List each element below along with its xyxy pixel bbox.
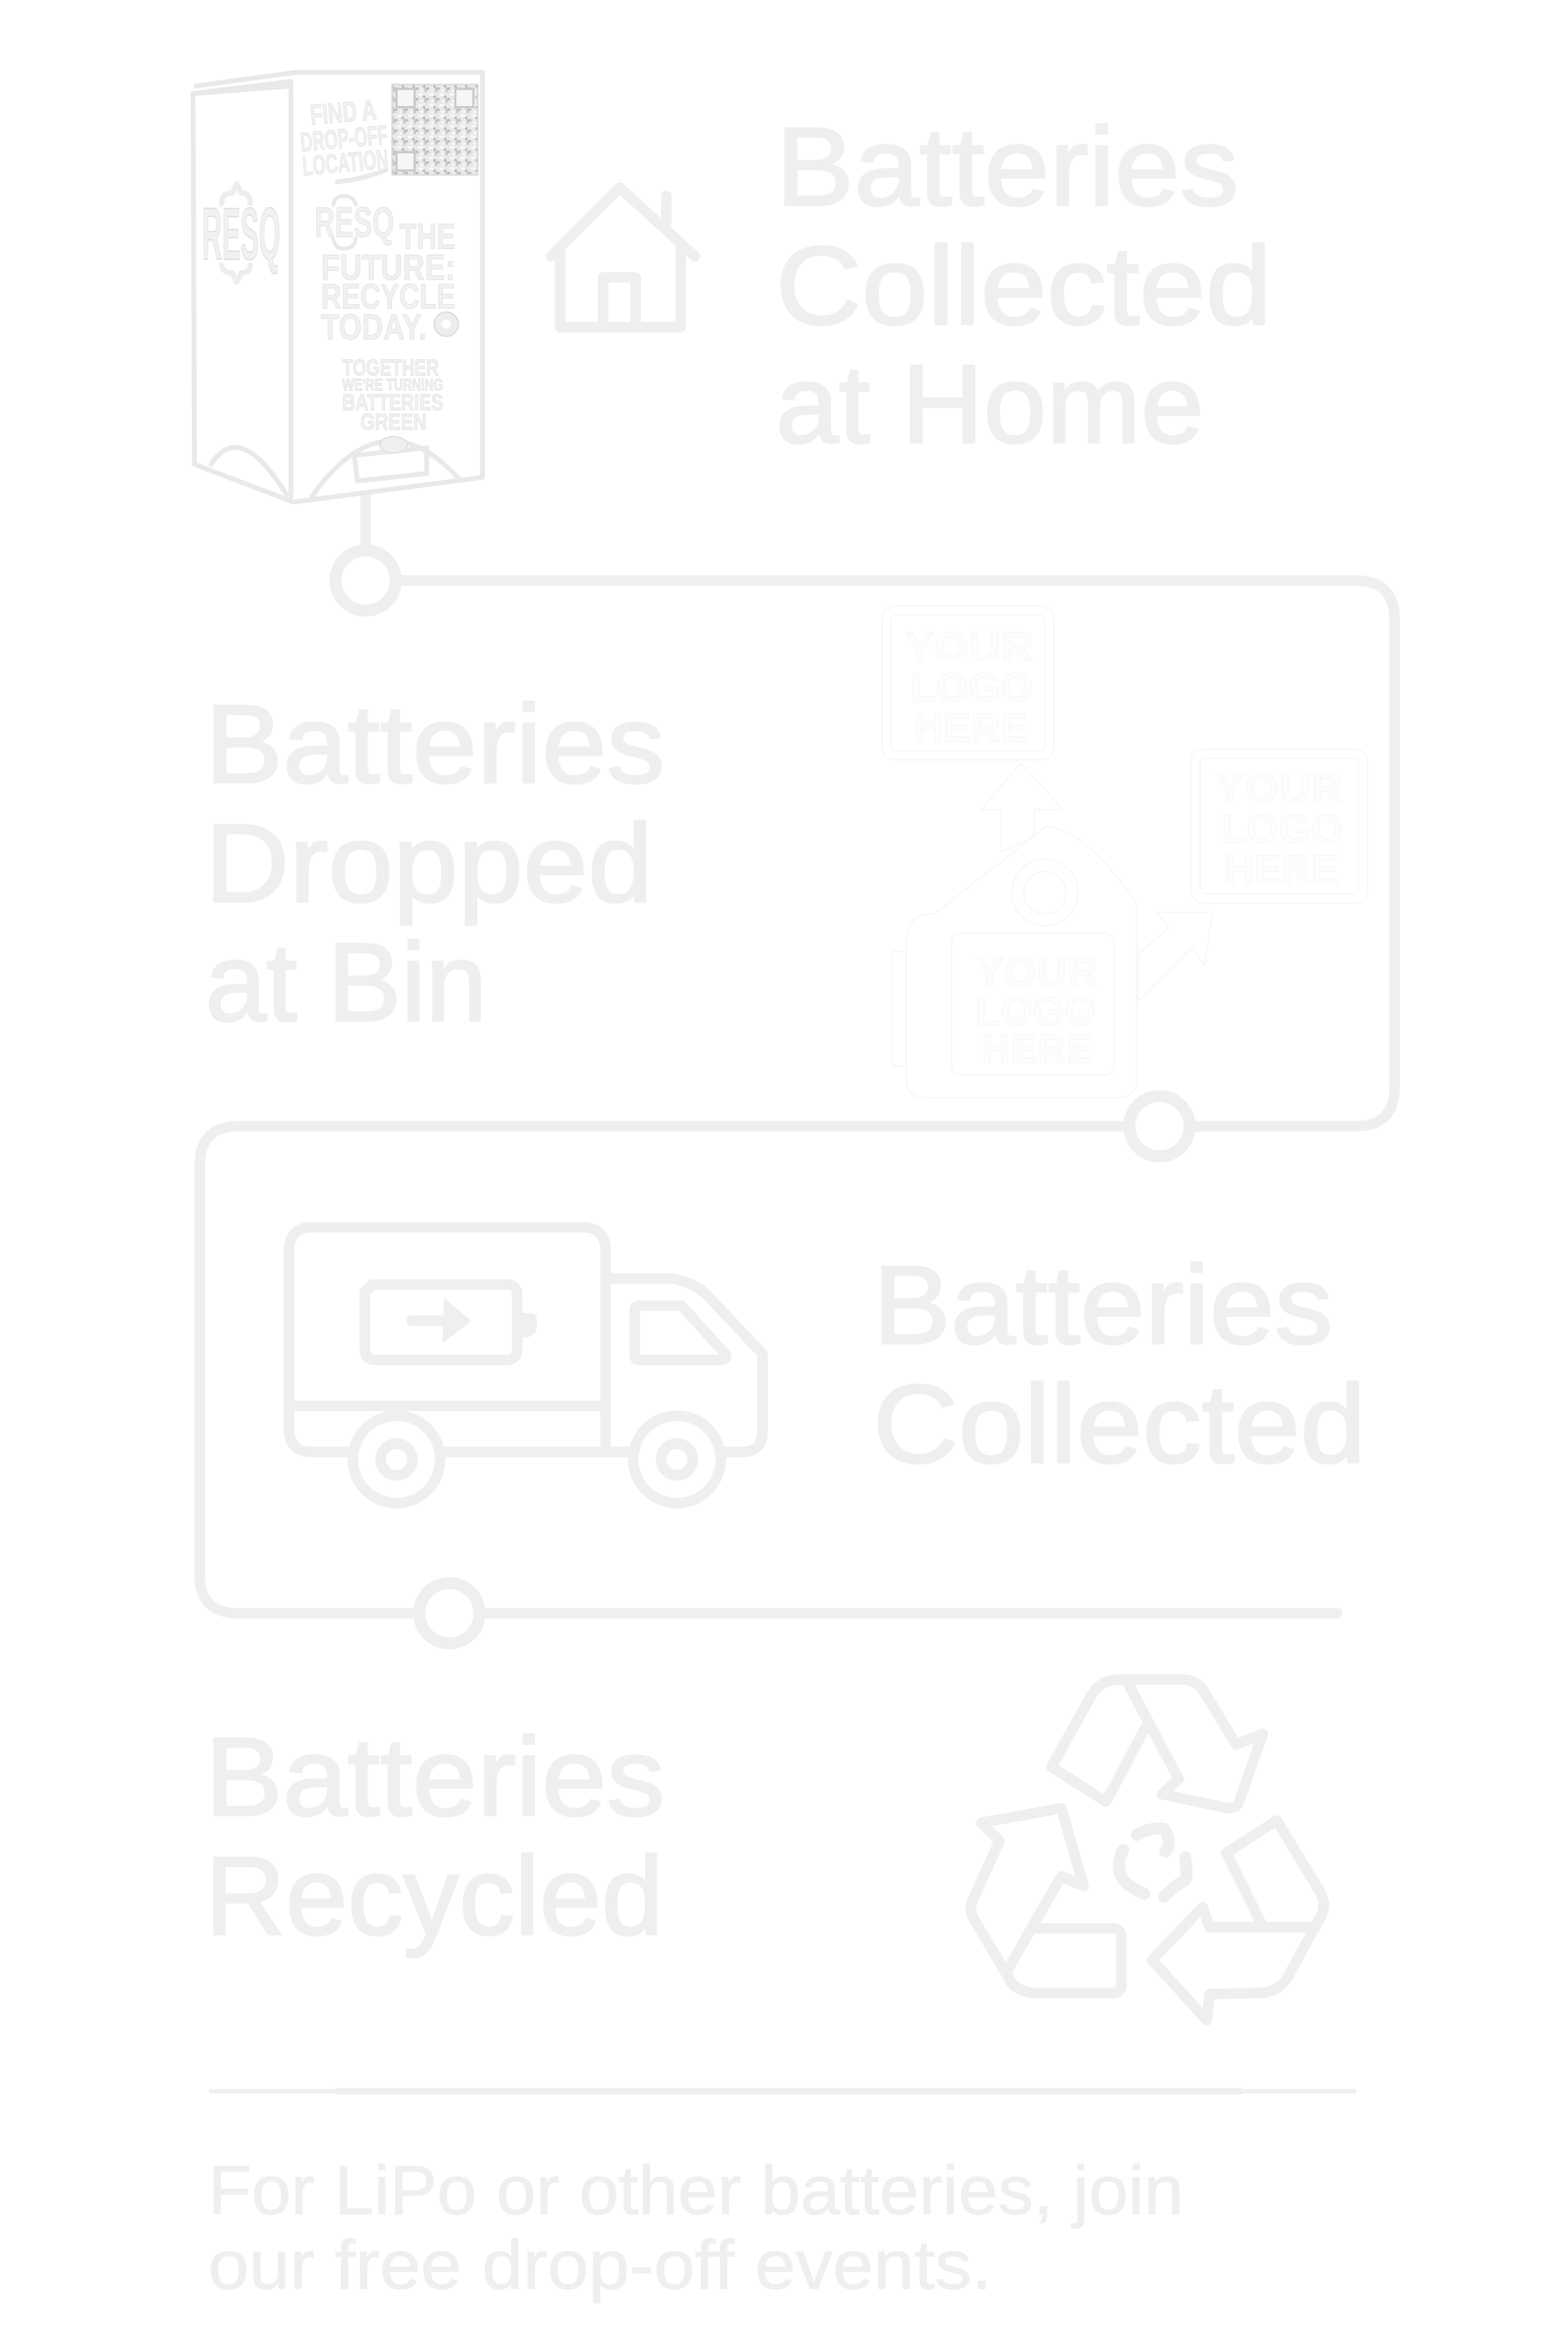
- path connecting the steps: [200, 497, 1395, 1643]
- divider: [211, 2090, 1354, 2092]
- carton drop-off prompt: LOCATION: [301, 144, 389, 182]
- heading: batteries collected: Batteries: [873, 1242, 1333, 1367]
- bin body: HERE: [982, 1026, 1093, 1072]
- footer note: [208, 2152, 1184, 2304]
- left arrow: [971, 1808, 1121, 1993]
- carton slogan: THE: [400, 217, 455, 257]
- arrow: diagonal: [1138, 912, 1212, 1001]
- heading: batteries recycled: Recycled: [205, 1833, 664, 1958]
- carton slogan: TODAY.: [321, 307, 426, 347]
- heading: batteries collected at home: Batteries: [776, 104, 1239, 229]
- icon: delivery truck with battery: [289, 1227, 763, 1503]
- wheels: [352, 1416, 440, 1503]
- heading: batteries dropped at bin: [205, 682, 665, 1044]
- carton slogan: FUTURE:: [321, 248, 455, 288]
- truck window: [635, 1306, 726, 1360]
- logo placeholder: right: YOUR: [1216, 765, 1343, 811]
- logo placeholder: top: YOUR: [904, 623, 1033, 669]
- footer note: For LiPo or other batteries, join: [208, 2152, 1184, 2229]
- battery: [365, 1285, 517, 1360]
- logo placeholder: top: [882, 606, 1054, 760]
- carton slogan: RESQ: [314, 199, 395, 246]
- carton tagline: TOGETHER: [342, 355, 439, 381]
- bin body: LOGO: [975, 988, 1096, 1034]
- logo placeholder: right: [1191, 750, 1367, 903]
- heading: batteries collected: [873, 1242, 1366, 1486]
- right arrow: [1152, 1821, 1324, 2020]
- carton tagline: [342, 355, 443, 435]
- arrow: up: [982, 763, 1063, 852]
- footer note: our free drop-off events.: [208, 2227, 992, 2304]
- carton drop-off prompt: DROP-OFF: [299, 120, 389, 158]
- heading: batteries collected at home: at Home: [776, 342, 1204, 467]
- icon: drop-off bin with logo placeholders: [882, 606, 1367, 1098]
- QR code: [392, 85, 478, 175]
- logo placeholder: top: LOGO: [911, 664, 1033, 710]
- carton tagline: WE'RE TURNING: [342, 376, 443, 395]
- heading: batteries collected: Collected: [873, 1362, 1366, 1486]
- icon: collection carton: [193, 72, 482, 502]
- carton tagline: GREEN: [361, 409, 426, 435]
- heading: batteries recycled: Batteries: [205, 1714, 665, 1839]
- logo placeholder: top: HERE: [914, 705, 1028, 751]
- heading: batteries dropped at bin: at Bin: [205, 919, 487, 1044]
- heading: batteries dropped at bin: Batteries: [205, 682, 665, 807]
- heading: batteries recycled: [205, 1714, 665, 1958]
- heading: batteries dropped at bin: Dropped: [205, 801, 653, 926]
- truck cab: [606, 1278, 763, 1452]
- bin body: [893, 826, 1136, 1098]
- truck body: [289, 1227, 633, 1452]
- icon: recycling symbol: [971, 1680, 1324, 2020]
- logo placeholder: right: HERE: [1224, 847, 1339, 893]
- carton drop-off prompt: FIND A: [309, 93, 378, 131]
- center small arrows: [1119, 1828, 1187, 1897]
- carton side logo: [202, 184, 280, 282]
- carton side logo: RESQ: [202, 193, 280, 275]
- carton drop-off prompt: [297, 93, 391, 184]
- top arrow: [1051, 1680, 1263, 1808]
- carton outline: [193, 72, 482, 502]
- carton tagline: BATTERIES: [342, 389, 443, 415]
- carton slogan: RECYCLE: [321, 277, 455, 316]
- bin body: YOUR: [975, 949, 1098, 995]
- heading: batteries collected at home: [776, 104, 1272, 467]
- heading: batteries collected at home: Collected: [776, 223, 1272, 348]
- carton slogan: [314, 196, 458, 347]
- icon: house: [551, 188, 695, 327]
- logo placeholder: right: LOGO: [1221, 806, 1343, 852]
